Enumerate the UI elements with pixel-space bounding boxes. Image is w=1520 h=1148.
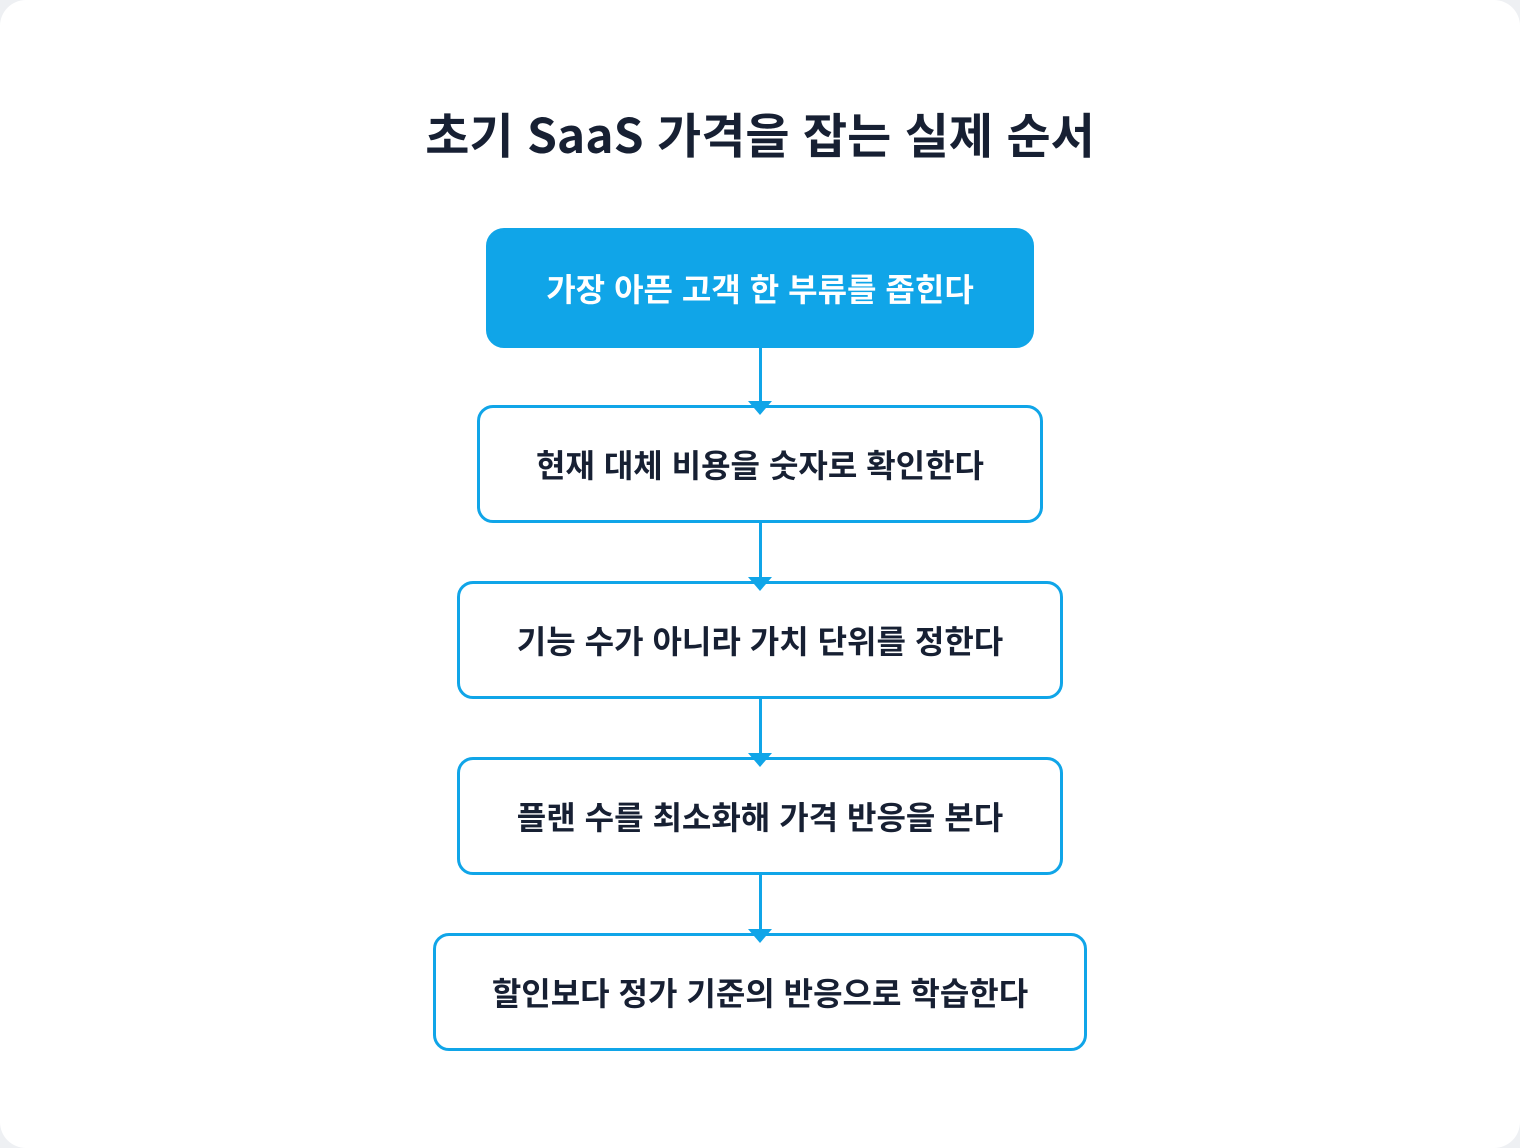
title: 초기 SaaS 가격을 잡는 실제 순서 [425,97,1095,167]
step 3 [457,581,1063,699]
arrow 1 [748,348,772,415]
arrow 3 [748,699,772,767]
arrow 2 [748,523,772,591]
step 4 [457,757,1063,875]
arrow 4 [748,875,772,943]
step 1 [486,228,1034,348]
step 1: 가장 아픈 고객 한 부류를 좁힌다 [546,265,974,311]
step 5 [433,933,1087,1051]
step 2 [477,405,1043,523]
step 2: 현재 대체 비용을 숫자로 확인한다 [536,441,984,487]
step 5: 할인보다 정가 기준의 반응으로 학습한다 [492,969,1028,1015]
step 3: 기능 수가 아니라 가치 단위를 정한다 [517,617,1003,663]
step 4: 플랜 수를 최소화해 가격 반응을 본다 [517,793,1003,839]
